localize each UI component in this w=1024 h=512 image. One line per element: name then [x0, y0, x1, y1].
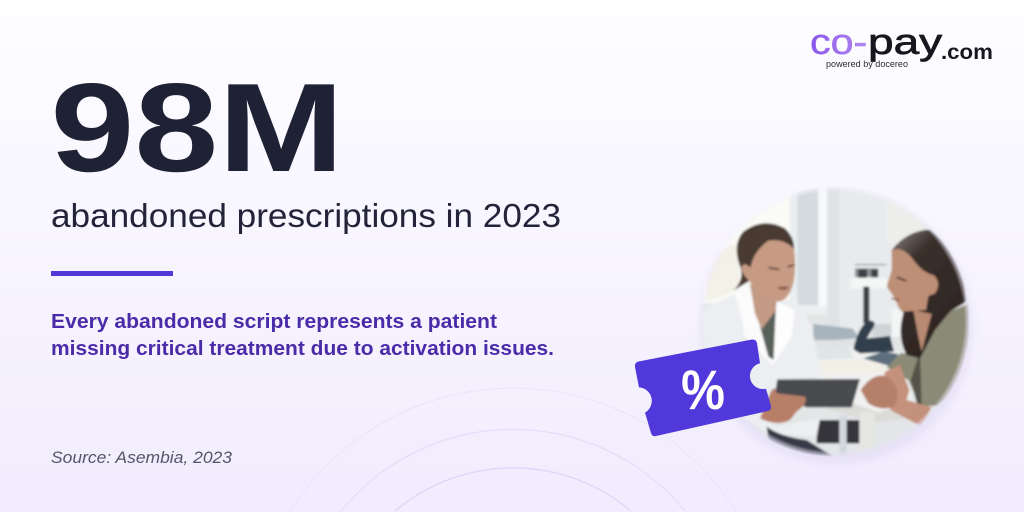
photo: patient hair [892, 229, 967, 358]
photo: doctor face [741, 240, 795, 302]
description text: Every abandoned script represents a patient [51, 310, 497, 333]
photo: window [702, 196, 790, 304]
logo [810, 21, 993, 69]
photo: doctor legs [767, 427, 833, 457]
photo: patient hands [861, 376, 897, 408]
photo: monitor [892, 308, 903, 337]
logo: powered by: powered by docereo [826, 59, 908, 69]
photo: doctor hair [733, 223, 794, 291]
photo: scale [851, 264, 887, 323]
photo: patient neck [913, 310, 932, 352]
logo: .com: .com [941, 40, 993, 64]
photo: patient shirt [887, 303, 969, 406]
photo: tablet [775, 379, 860, 407]
photo: doctor and patient [697, 183, 973, 465]
photo: table edge and legs [829, 404, 904, 422]
subtitle: abandoned prescriptions in 2023 [51, 198, 561, 235]
photo: patient face [887, 249, 938, 312]
coupon ticket [635, 339, 771, 436]
photo: right wall [827, 183, 841, 330]
accent bar [51, 271, 173, 276]
description text [51, 310, 554, 360]
logo: co-: co- [810, 22, 867, 62]
photo: doctor coat [704, 295, 822, 437]
photo: desk [813, 347, 913, 413]
source note: Source: Asembia, 2023 [51, 448, 233, 467]
photo: patient forearm [880, 365, 932, 427]
photo: keyboard [863, 352, 898, 367]
percent sign: % [681, 359, 725, 422]
concentric arcs [290, 388, 736, 511]
logo: pay: pay [868, 21, 942, 62]
description text: missing critical treatment due to activation issues. [51, 337, 554, 360]
photo: curtain [790, 198, 796, 296]
photo: doctor hand [760, 388, 806, 423]
photo: exam bed [813, 324, 857, 342]
headline stat: 98M [50, 58, 344, 198]
ticket shape [635, 339, 771, 436]
photo: phone [853, 321, 894, 353]
photo: wall [702, 303, 934, 454]
